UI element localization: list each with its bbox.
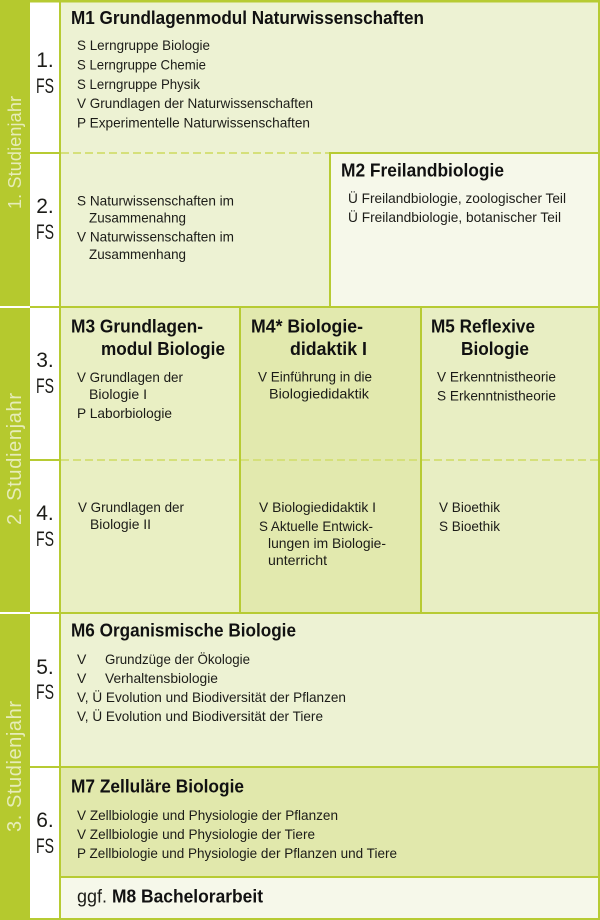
panel: M4 Biologiedidaktik I: unterricht — [268, 552, 327, 568]
sidebar: Studienjahr bars: 2. Studienjahr — [4, 393, 26, 525]
panel: M1 Grundlagenmodul Naturwissenschaften: V Naturwissenschaften im — [77, 228, 234, 244]
panel: M3 Grundlagenmodul Biologie: V Grundlagen der — [78, 499, 184, 515]
panel: M5 Reflexive Biologie: M5 Reflexive — [431, 316, 535, 336]
semester labels: 1. — [36, 49, 54, 72]
panel: M2 Freilandbiologie — [331, 154, 598, 306]
panel: M5 Reflexive Biologie: S Erkenntnistheorie — [437, 388, 556, 404]
panel: M1 Grundlagenmodul Naturwissenschaften: M1 Grundlagenmodul Naturwissenschaften — [71, 7, 424, 28]
semester labels: 4. — [36, 502, 54, 525]
semester labels: 5. — [36, 656, 54, 679]
panel: M6 Organismische Biologie: V — [77, 651, 87, 667]
panel: M1 Grundlagenmodul Naturwissenschaften: Zusammenahng — [89, 210, 186, 226]
panel: M1 Grundlagenmodul Naturwissenschaften: P Experimentelle Naturwissenschaften — [77, 114, 310, 130]
panel: M2 Freilandbiologie: Ü Freilandbiologie, zoologischer Teil — [348, 189, 566, 206]
panel: M5 Reflexive Biologie: V Bioethik — [439, 499, 501, 515]
panel: M4 Biologiedidaktik I: M4* Biologie- — [251, 316, 363, 336]
sidebar: Studienjahr bars: 1. Studienjahr — [5, 96, 25, 209]
panel: M7 Zelluläre Biologie: V Zellbiologie und Physiologie der Tiere — [77, 826, 315, 842]
panel: M7 Zelluläre Biologie: P Zellbiologie und Physiologie der Pflanzen und Tiere — [77, 845, 397, 861]
panel: M5 Reflexive Biologie: S Bioethik — [439, 518, 501, 534]
semester labels: FS — [36, 75, 54, 98]
panel: M6 Organismische Biologie: V, Ü Evolution und Biodiversität der Tiere — [77, 707, 323, 724]
panel: M6 Organismische Biologie: V — [77, 670, 87, 686]
dashed semester dividers — [61, 153, 598, 460]
panel: M5 Reflexive Biologie: Biologie — [461, 338, 529, 359]
panel: M6 Organismische Biologie: M6 Organismische Biologie — [71, 620, 296, 640]
semester labels: FS — [36, 528, 54, 551]
panel: M6 Organismische Biologie: Grundzüge der Ökologie — [105, 650, 250, 667]
semester labels: 6. — [36, 809, 54, 832]
panel: M4 Biologiedidaktik I: V Einführung in die — [258, 368, 372, 384]
panel: M3 Grundlagenmodul Biologie: Biologie II — [90, 516, 151, 532]
panel: M8 Bachelorarbeit: ggf. — [77, 886, 107, 906]
panel: M4 Biologiedidaktik I: lungen im Biologie- — [268, 535, 386, 551]
sidebar: Studienjahr bars: 3. Studienjahr — [4, 701, 26, 832]
semester labels: FS — [36, 681, 54, 704]
semester labels: FS — [36, 221, 54, 244]
panel: M1 Grundlagenmodul Naturwissenschaften: V Grundlagen der Naturwissenschaften — [77, 95, 313, 111]
panel: M1 Grundlagenmodul Naturwissenschaften — [60, 2, 598, 306]
panel: M5 Reflexive Biologie — [420, 307, 598, 613]
sidebar: Studienjahr bars — [0, 0, 30, 920]
panel: M8 Bachelorarbeit: M8 Bachelorarbeit — [112, 886, 263, 906]
panel: M1 Grundlagenmodul Naturwissenschaften: S Lerngruppe Biologie — [77, 37, 210, 53]
semester labels — [36, 49, 54, 858]
panel: M3 Grundlagenmodul Biologie: Biologie I — [89, 386, 147, 402]
panel: M3 Grundlagenmodul Biologie: P Laborbiologie — [77, 405, 172, 421]
panel: M2 Freilandbiologie: Ü Freilandbiologie, botanischer Teil — [348, 208, 561, 225]
semester labels: FS — [36, 375, 54, 398]
panel: M7 Zelluläre Biologie: M7 Zelluläre Biologie — [71, 776, 244, 796]
semester labels: FS — [36, 835, 54, 858]
panel: M3 Grundlagenmodul Biologie: V Grundlagen der — [77, 369, 183, 385]
panel: M6 Organismische Biologie: Verhaltensbiologie — [105, 670, 218, 686]
panel: M3 Grundlagenmodul Biologie — [60, 307, 240, 613]
panel: M1 Grundlagenmodul Naturwissenschaften: Zusammenhang — [89, 246, 186, 262]
panel: M4 Biologiedidaktik I: didaktik I — [290, 338, 367, 359]
panel: M5 Reflexive Biologie: V Erkenntnistheorie — [437, 368, 556, 384]
panel: M6 Organismische Biologie: V, Ü Evolution und Biodiversität der Pflanzen — [77, 688, 346, 705]
semester labels: 3. — [36, 349, 54, 372]
panel: M4 Biologiedidaktik I: S Aktuelle Entwick- — [259, 518, 373, 534]
panel: M6 Organismische Biologie — [60, 613, 598, 767]
semester labels: 2. — [36, 195, 54, 218]
panel: M3 Grundlagenmodul Biologie: M3 Grundlagen- — [71, 316, 203, 336]
panel: M1 Grundlagenmodul Naturwissenschaften: S Lerngruppe Chemie — [77, 56, 206, 72]
panel: M1 Grundlagenmodul Naturwissenschaften: S Lerngruppe Physik — [77, 76, 201, 92]
panel: M3 Grundlagenmodul Biologie: modul Biologie — [101, 338, 225, 359]
panel: M4 Biologiedidaktik I — [240, 307, 420, 613]
panel: M4 Biologiedidaktik I: Biologiedidaktik — [269, 386, 370, 402]
panel: M1 Grundlagenmodul Naturwissenschaften: S Naturwissenschaften im — [77, 192, 234, 208]
panel: M4 Biologiedidaktik I: V Biologiedidaktik I — [259, 499, 376, 515]
panel: M7 Zelluläre Biologie: V Zellbiologie und Physiologie der Pflanzen — [77, 807, 338, 823]
panel: M7 Zelluläre Biologie — [60, 767, 598, 877]
panel: M2 Freilandbiologie: M2 Freilandbiologie — [341, 160, 504, 180]
panel: M8 Bachelorarbeit — [60, 877, 598, 918]
